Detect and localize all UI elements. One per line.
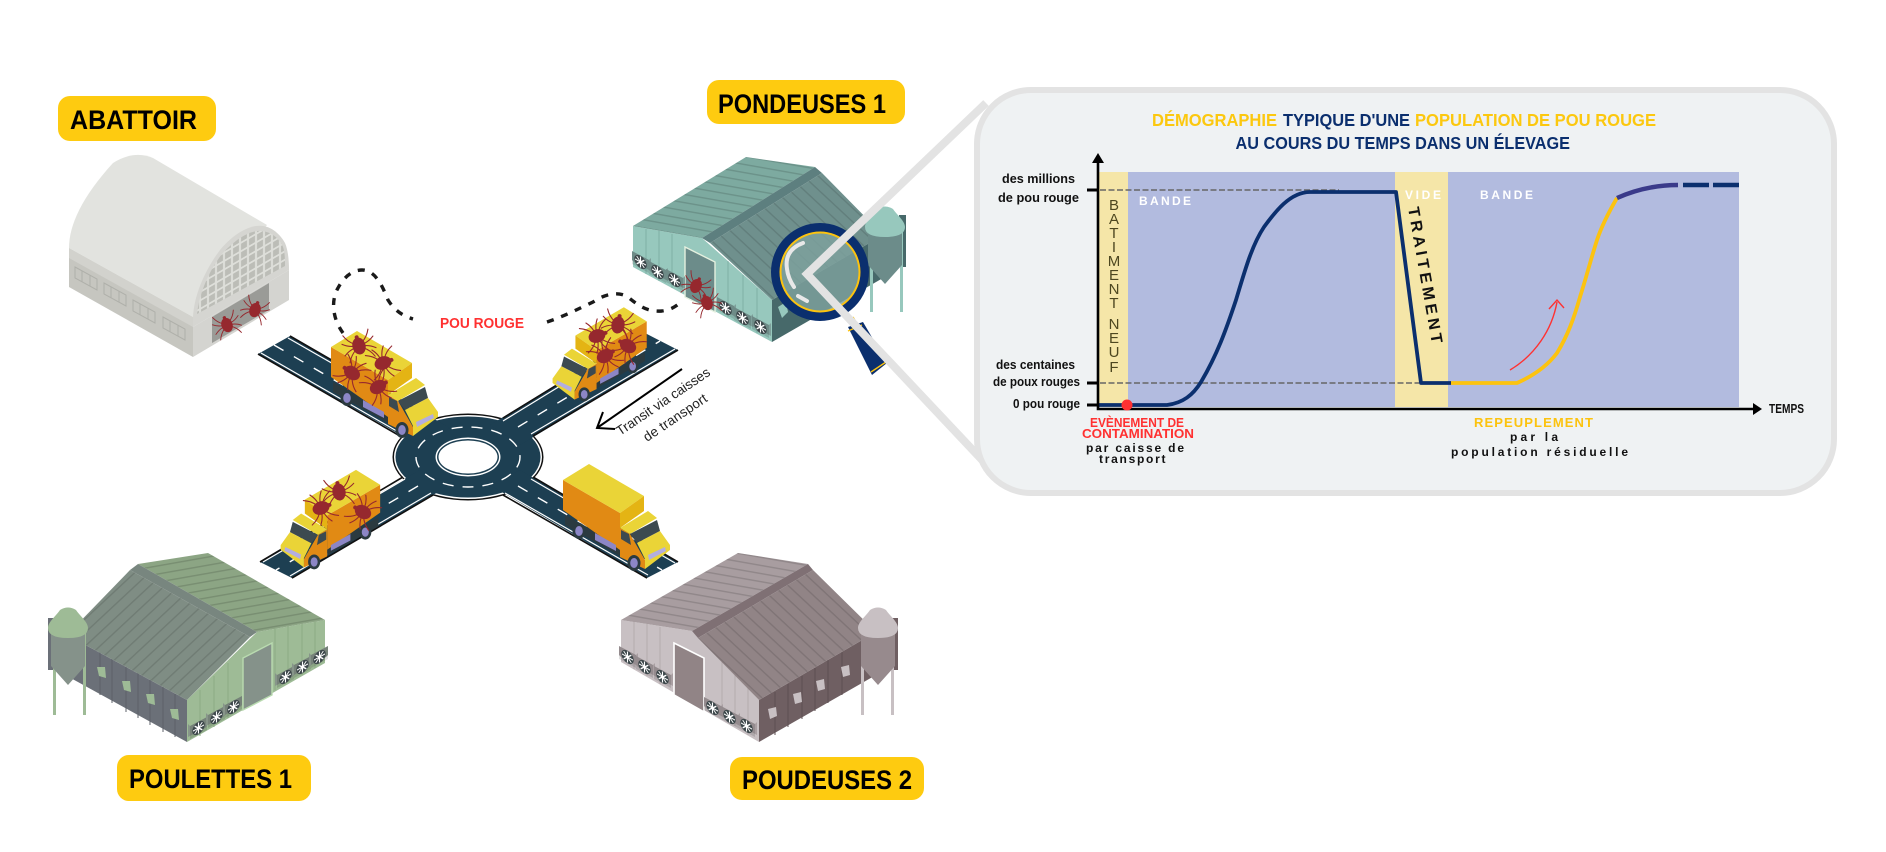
axes: [1087, 153, 1762, 415]
batiment neuf vertical label: N: [1109, 316, 1119, 333]
silo: [48, 608, 88, 715]
contamination label: CONTAMINATION: [1082, 426, 1194, 441]
curve: navy growth and drop: [1098, 192, 1451, 405]
contamination dot: [1122, 400, 1132, 410]
label: abattoir: ABATTOIR: [70, 105, 197, 135]
curve: dashes: [1683, 183, 1739, 187]
mites on truck: [331, 328, 402, 408]
batiment neuf vertical label: E: [1109, 330, 1119, 347]
curve: yellow repopulation: [1451, 198, 1617, 383]
transit label: de transport: [640, 391, 710, 444]
label: pondeuses 1: PONDEUSES 1: [718, 89, 886, 119]
batiment neuf vertical label: I: [1112, 239, 1116, 256]
truck: north-west, infested: [331, 328, 438, 438]
label: pou rouge: POU ROUGE: [440, 316, 524, 332]
batiment neuf vertical label: M: [1108, 253, 1120, 270]
building: poudeuses 2: [619, 553, 898, 742]
label: pondeuses 1: [707, 80, 905, 124]
batiment neuf vertical label: F: [1109, 359, 1119, 376]
batiment neuf vertical label: T: [1109, 295, 1119, 312]
batiment neuf vertical label: A: [1109, 211, 1119, 228]
building: poulettes 1: [48, 553, 328, 742]
silo: [858, 608, 898, 715]
panel: demography chart: [977, 90, 1834, 493]
mites on truck: [302, 475, 383, 533]
chart title: POPULATION DE POU ROUGE: [1415, 110, 1656, 130]
traitement rotated label: TRAITEMENT: [1404, 206, 1445, 345]
transit arrow: [597, 369, 682, 429]
chart title: [1152, 109, 1656, 153]
dashed path left: [334, 270, 413, 333]
mites at abattoir door: [210, 294, 272, 341]
axis labels: des millions: [1002, 171, 1075, 186]
repeuplement label: [1451, 415, 1628, 459]
batiment neuf vertical label: T: [1109, 225, 1119, 242]
band labels: VIDE: [1405, 188, 1441, 202]
chart title: DÉMOGRAPHIE: [1152, 109, 1277, 130]
curve: purple plateau: [1617, 185, 1678, 198]
label: abattoir: [58, 96, 216, 141]
truck: south-west, infested: [281, 470, 383, 569]
chart title: AU COURS DU TEMPS DANS UN ÉLEVAGE: [1236, 132, 1570, 153]
road network with roundabout: [258, 332, 678, 578]
contamination label: transport: [1099, 452, 1166, 466]
batiment neuf vertical label: N: [1109, 281, 1119, 298]
batiment neuf vertical label: U: [1109, 344, 1119, 361]
axis labels: de poux rouges: [993, 374, 1080, 389]
label: poudeuses 2: POUDEUSES 2: [742, 765, 912, 795]
label: poulettes 1: POULETTES 1: [129, 764, 292, 794]
contamination label: [1082, 415, 1194, 466]
plot background bands: [1099, 172, 1739, 407]
contamination label: par caisse de: [1086, 441, 1184, 455]
silo: [865, 206, 906, 312]
batiment neuf vertical label: [1108, 197, 1120, 376]
chart title: TYPIQUE D'UNE: [1283, 110, 1410, 130]
band labels: BANDE: [1480, 188, 1533, 202]
axis labels: de pou rouge: [998, 190, 1079, 205]
magnifying glass: [776, 228, 887, 375]
mites at door: [679, 269, 724, 319]
axis labels: TEMPS: [1769, 401, 1804, 416]
batiment neuf vertical label: E: [1109, 267, 1119, 284]
axis labels: [993, 171, 1804, 416]
transit label: Transit via caisses: [613, 364, 713, 438]
axis labels: des centaines: [996, 357, 1075, 372]
building: pondeuses 1: [632, 157, 906, 342]
red growth arrow: [1510, 300, 1564, 370]
label: poulettes 1: [117, 755, 311, 801]
band labels: [1139, 188, 1533, 208]
dashed reference lines: [1100, 190, 1419, 383]
contamination label: EVÈNEMENT DE: [1090, 415, 1184, 430]
repeuplement label: REPEUPLEMENT: [1474, 415, 1593, 430]
dashed path right: [547, 294, 680, 322]
repeuplement label: population résiduelle: [1451, 445, 1628, 459]
axis labels: 0 pou rouge: [1013, 396, 1080, 411]
building: abattoir: [69, 155, 289, 357]
repeuplement label: par la: [1510, 430, 1558, 444]
truck: south-east, clean: [563, 464, 670, 571]
label: poudeuses 2: [730, 757, 924, 800]
mites on truck: [578, 308, 648, 377]
batiment neuf vertical label: B: [1109, 197, 1119, 214]
band labels: BANDE: [1139, 194, 1191, 208]
zoom connector lines: [807, 103, 986, 462]
truck: north-east, infested: [553, 307, 648, 401]
